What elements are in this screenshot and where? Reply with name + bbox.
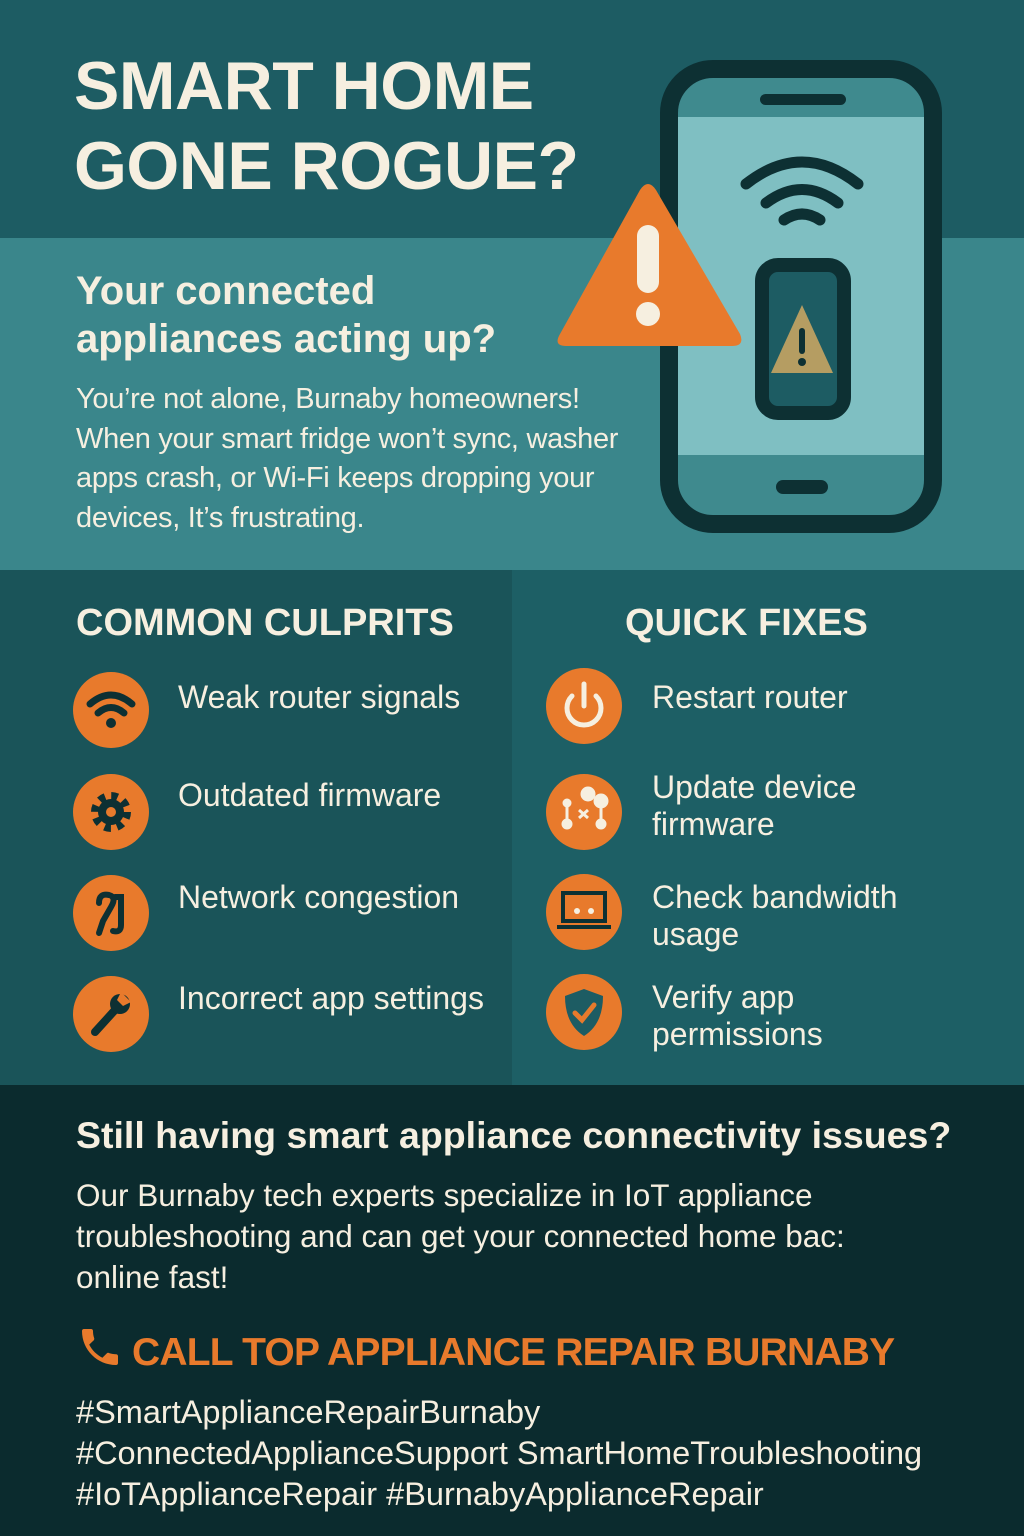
top band: [0, 0, 1024, 238]
subheading: [76, 269, 496, 361]
heading: quick fixes: QUICK FIXES: [625, 602, 868, 644]
item: permissions: Verify app: [652, 979, 794, 1015]
item: congestion: Network congestion: [178, 879, 459, 915]
panel: culprits background: [0, 570, 512, 1085]
title: GONE ROGUE?: [74, 128, 579, 204]
item: update firmware: [652, 769, 857, 842]
illustration: phone with warning: [558, 60, 942, 533]
intro paragraph: You’re not alone, Burnaby homeowners!: [76, 383, 580, 415]
subheading: appliances acting up?: [76, 317, 496, 361]
item: update firmware: firmware: [652, 806, 775, 842]
cta paragraph: [76, 1177, 845, 1295]
item: update firmware: Update device: [652, 769, 857, 805]
icon: wifi: [73, 672, 149, 748]
subheading: Your connected: [76, 269, 375, 313]
intro band: [0, 238, 1024, 570]
item: app settings: Incorrect app settings: [178, 980, 484, 1016]
panel: fixes background: [512, 570, 1024, 1085]
item: weak router: Weak router signals: [178, 679, 460, 715]
cta paragraph: troubleshooting and can get your connected home bac:: [76, 1218, 845, 1254]
culprits list: [73, 672, 484, 1052]
icon: devices: [546, 774, 622, 850]
item: permissions: [652, 979, 823, 1052]
hashtags: #SmartApplianceRepairBurnaby: [76, 1394, 540, 1430]
item: restart router: Restart router: [652, 679, 848, 715]
icon: phone: [82, 1329, 118, 1365]
panel: call to action background: [0, 1085, 1024, 1536]
intro paragraph: When your smart fridge won’t sync, washer: [76, 422, 618, 454]
icon: shield: [546, 974, 622, 1050]
intro paragraph: apps crash, or Wi-Fi keeps dropping your: [76, 462, 594, 494]
cta paragraph: online fast!: [76, 1259, 228, 1295]
call line with phone icon: CALL TOP APPLIANCE REPAIR BURNABY: [132, 1331, 894, 1374]
icon: laptop: [546, 874, 622, 950]
item: bandwidth: usage: [652, 916, 739, 952]
fixes list: [546, 668, 897, 1052]
intro paragraph: [76, 383, 618, 534]
hashtags: [76, 1394, 922, 1512]
icon: power: [546, 668, 622, 744]
hashtags: #IoTApplianceRepair #BurnabyApplianceRepair: [76, 1476, 764, 1512]
icon: network: [73, 875, 149, 951]
title: SMART HOME: [74, 48, 534, 124]
cta paragraph: Our Burnaby tech experts specialize in IoT appliance: [76, 1177, 813, 1213]
item: permissions: permissions: [652, 1016, 823, 1052]
icon: wrench: [73, 976, 149, 1052]
item: bandwidth: Check bandwidth: [652, 879, 897, 915]
intro paragraph: devices, It’s frustrating.: [76, 502, 364, 534]
icon: gear: [73, 774, 149, 850]
title: [74, 48, 579, 204]
item: firmware: Outdated firmware: [178, 777, 441, 813]
heading: common culprits: COMMON CULPRITS: [76, 602, 454, 644]
hashtags: #ConnectedApplianceSupport SmartHomeTroubleshooting: [76, 1435, 922, 1471]
cta heading: Still having smart appliance connectivity issues?: [76, 1114, 951, 1156]
item: bandwidth: [652, 879, 897, 952]
